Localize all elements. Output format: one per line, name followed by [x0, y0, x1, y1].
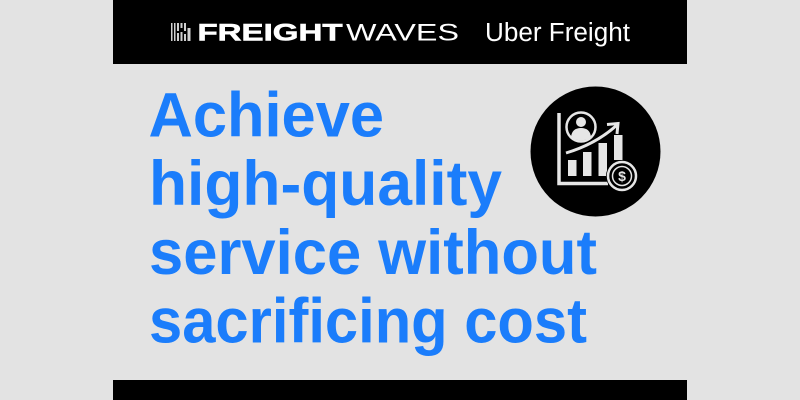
logo: FreightWaves wordmark: FREIGHT — [198, 20, 343, 46]
icon: analytics badge with person, rising bars and dollar coin — [530, 86, 660, 216]
icon: FreightWaves logo mark — [171, 23, 190, 41]
headline: service without — [149, 218, 597, 288]
bars — [568, 135, 622, 176]
logo: FreightWaves wordmark — [198, 20, 459, 46]
header bar with logos — [113, 0, 687, 64]
footer bar — [113, 380, 687, 400]
headline: sacrificing cost — [149, 286, 587, 356]
logo: FreightWaves wordmark: WAVES — [346, 20, 459, 46]
headline: high-quality — [149, 149, 502, 219]
person avatar — [566, 112, 596, 142]
logo: Uber Freight: Uber Freight — [485, 19, 630, 47]
headline: Achieve — [148, 80, 384, 150]
dollar coin: $ — [618, 168, 626, 184]
chart axes — [559, 113, 608, 184]
trend arrow — [566, 124, 618, 153]
headline — [148, 80, 597, 356]
